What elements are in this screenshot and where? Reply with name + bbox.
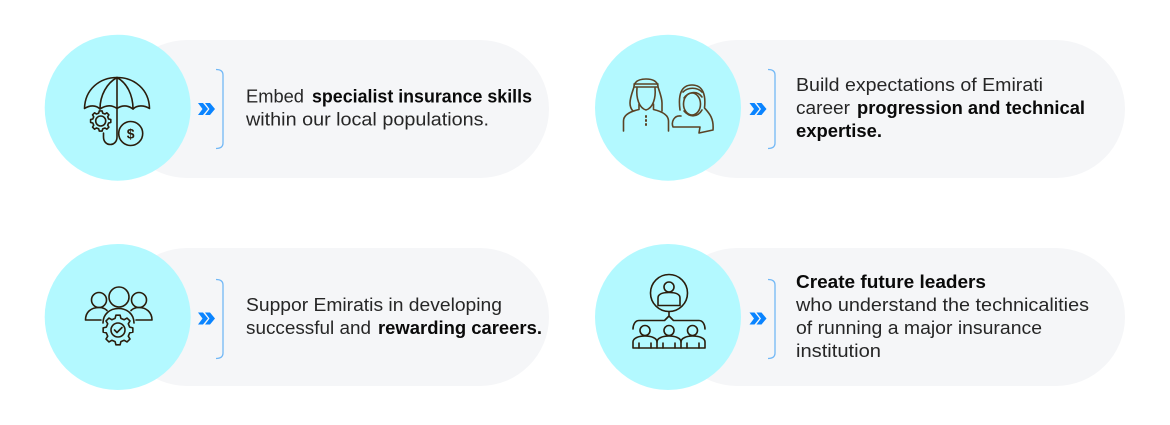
- pill background: [118, 40, 549, 178]
- chevrons arrow: [750, 103, 766, 115]
- panel: future leaders: [595, 244, 1125, 390]
- text block: specialist insurance skills: [312, 86, 532, 106]
- pill background: [118, 248, 549, 386]
- text block: progression and technical: [857, 98, 1085, 118]
- pill background: [668, 40, 1125, 178]
- text block: [246, 295, 542, 338]
- text block: of running a major insurance: [796, 318, 1042, 338]
- text block: within our local populations.: [245, 110, 489, 130]
- chevrons arrow: [750, 312, 766, 324]
- panel: specialist insurance skills: [45, 35, 549, 181]
- panel: career progression: [595, 35, 1125, 181]
- text block: career: [796, 98, 850, 118]
- icon: Emirati man and woman: [624, 79, 713, 133]
- bracket: [768, 280, 775, 358]
- bracket: [768, 70, 775, 148]
- bracket: [216, 70, 223, 148]
- icon: umbrella with gear and dollar: [84, 78, 150, 146]
- chevrons arrow: [198, 103, 215, 115]
- text block: who understand the technicalities: [795, 295, 1089, 315]
- bracket: [216, 280, 223, 358]
- text block: rewarding careers.: [378, 318, 542, 338]
- text block: Suppor Emiratis in developing: [246, 295, 502, 315]
- text block: institution: [796, 341, 881, 361]
- chevrons arrow: [198, 312, 215, 324]
- pill background: [668, 248, 1125, 386]
- text block: Build expectations of Emirati: [796, 75, 1043, 95]
- text block: [795, 272, 1089, 361]
- text block: expertise.: [796, 121, 882, 141]
- text block: Embed: [246, 86, 304, 106]
- circle badge: [45, 244, 191, 390]
- icon: team with gear and check: [86, 287, 152, 345]
- icon: leader and team hierarchy: [633, 274, 705, 348]
- text block: [796, 75, 1085, 141]
- panel: rewarding careers: [45, 244, 549, 390]
- text block: successful and: [246, 318, 371, 338]
- circle badge: [595, 244, 741, 390]
- circle badge: [595, 35, 741, 181]
- dollar sign: $: [127, 126, 135, 142]
- text block: Create future leaders: [796, 272, 986, 292]
- circle badge: [45, 35, 191, 181]
- text block: [245, 86, 532, 130]
